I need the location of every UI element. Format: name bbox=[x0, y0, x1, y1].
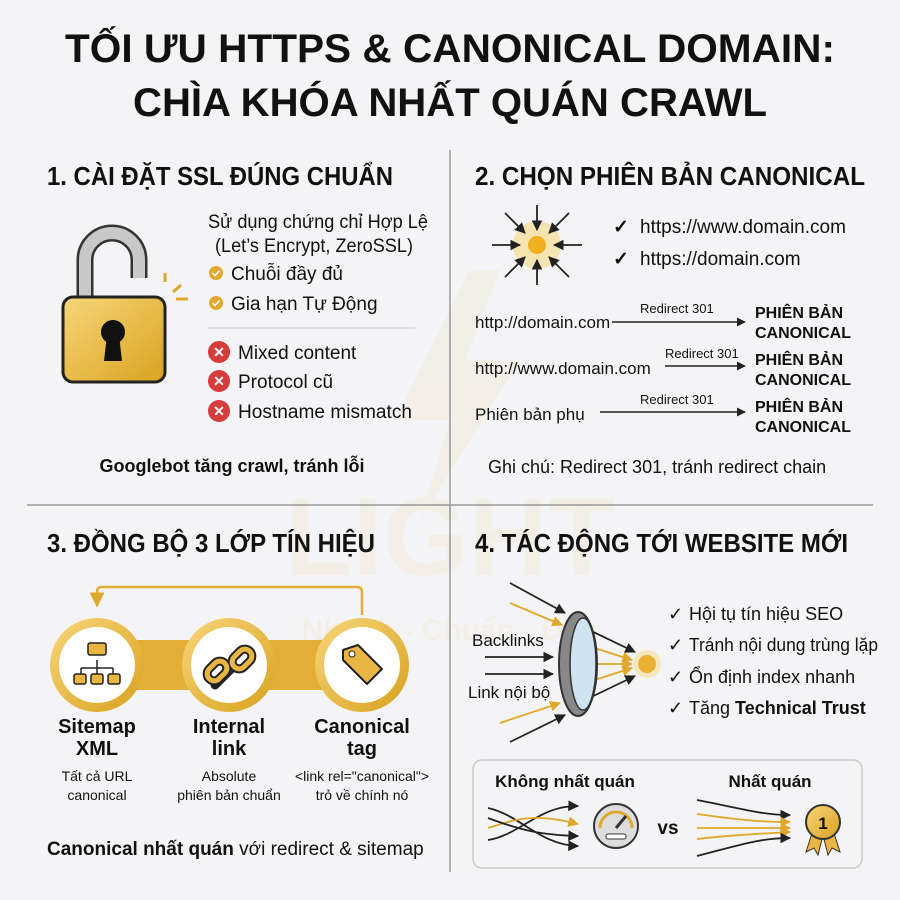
panel: impact bbox=[468, 528, 878, 868]
list: errors: Protocol cũ bbox=[238, 372, 333, 393]
list: chosen versions bbox=[613, 217, 846, 270]
redirect rows: PHIÊN BẢN bbox=[755, 350, 843, 369]
icon: link bbox=[204, 646, 255, 685]
icon: convergence burst bbox=[492, 205, 582, 285]
list: errors: ✕ bbox=[213, 344, 225, 360]
comparison box: vs bbox=[657, 818, 679, 839]
list: chosen versions: ✓ bbox=[613, 217, 629, 238]
labels: phiên bản chuẩn bbox=[177, 787, 281, 803]
labels: canonical bbox=[67, 787, 127, 803]
heading 2: 2. CHỌN PHIÊN BẢN CANONICAL bbox=[475, 161, 865, 191]
lens diagram: Backlinks bbox=[472, 631, 544, 650]
labels: <link rel="canonical"> bbox=[295, 768, 429, 784]
lens diagram: Link nội bộ bbox=[468, 683, 550, 702]
list: chosen versions: https://domain.com bbox=[640, 249, 801, 270]
list: chosen versions: https://www.domain.com bbox=[640, 217, 846, 238]
watermark: LIGHT bbox=[285, 476, 615, 599]
icon: gauge bbox=[594, 804, 638, 848]
list: chosen versions: ✓ bbox=[613, 249, 629, 270]
watermark bbox=[285, 270, 615, 647]
list: benefits: ✓ bbox=[668, 698, 683, 718]
note: Ghi chú: Redirect 301, tránh redirect chain bbox=[488, 457, 826, 477]
list: benefits: Tăng Technical Trust bbox=[689, 698, 866, 718]
list: errors bbox=[208, 341, 412, 423]
arrow: loop bbox=[97, 587, 362, 615]
title bbox=[65, 25, 835, 125]
labels: tag bbox=[347, 738, 377, 760]
labels: Absolute bbox=[202, 768, 256, 784]
heading 1: 1. CÀI ĐẶT SSL ĐÚNG CHUẨN bbox=[47, 161, 393, 191]
panel: canonical bbox=[475, 161, 865, 477]
labels: Tất cả URL bbox=[62, 768, 133, 784]
list: benefits: ✓ bbox=[668, 604, 683, 624]
labels bbox=[58, 716, 429, 803]
comparison box bbox=[473, 760, 862, 868]
lens diagram bbox=[468, 583, 661, 742]
list: benefits: Hội tụ tín hiệu SEO bbox=[689, 604, 843, 624]
redirect rows: CANONICAL bbox=[755, 372, 851, 389]
text: valid cert: Chuỗi đầy đủ bbox=[231, 263, 343, 285]
text: valid cert: Gia hạn Tự Động bbox=[231, 294, 378, 315]
watermark: Nhanh - Chuẩn - Đẹp bbox=[302, 614, 598, 647]
icon: medal bbox=[806, 805, 840, 855]
text: valid cert: Sử dụng chứng chỉ Hợp Lệ bbox=[208, 212, 428, 233]
panel: SSL bbox=[47, 161, 428, 476]
heading 4: 4. TÁC ĐỘNG TỚI WEBSITE MỚI bbox=[475, 528, 848, 558]
redirect rows: PHIÊN BẢN bbox=[755, 303, 843, 322]
panel: signals bbox=[47, 528, 429, 860]
comparison box: Nhất quán bbox=[728, 772, 812, 791]
list: benefits: Ổn định index nhanh bbox=[689, 666, 855, 687]
list: errors: ✕ bbox=[213, 403, 225, 419]
redirect rows: http://domain.com bbox=[475, 313, 610, 332]
redirect rows: Redirect 301 bbox=[665, 346, 739, 361]
icon: medal: 1 bbox=[818, 814, 828, 833]
redirect rows: PHIÊN BẢN bbox=[755, 397, 843, 416]
text: valid cert: (Let’s Encrypt, ZeroSSL) bbox=[215, 236, 413, 257]
labels: trỏ về chính nó bbox=[316, 787, 409, 803]
redirect rows: Phiên bản phụ bbox=[475, 405, 585, 424]
list: benefits: Tránh nội dung trùng lặp bbox=[689, 635, 878, 655]
title: TỐI ƯU HTTPS & CANONICAL DOMAIN: bbox=[65, 25, 835, 71]
chain of circles bbox=[50, 618, 409, 712]
list: benefits: ✓ bbox=[668, 667, 683, 687]
redirect rows: CANONICAL bbox=[755, 325, 851, 342]
list: errors: Mixed content bbox=[238, 343, 357, 364]
list: benefits bbox=[668, 604, 878, 718]
labels: Canonical bbox=[314, 716, 410, 738]
labels: Internal bbox=[193, 716, 265, 738]
redirect rows: CANONICAL bbox=[755, 419, 851, 436]
labels: XML bbox=[76, 738, 118, 760]
caption: Canonical nhất quán với redirect & sitemap bbox=[47, 839, 424, 860]
icon: padlock bbox=[63, 233, 188, 382]
icon: tag bbox=[343, 645, 382, 684]
icon: sitemap bbox=[74, 643, 120, 684]
heading 3: 3. ĐỒNG BỘ 3 LỚP TÍN HIỆU bbox=[47, 528, 375, 558]
text: valid cert bbox=[208, 212, 428, 315]
caption: Googlebot tăng crawl, tránh lỗi bbox=[99, 455, 365, 476]
comparison box: Không nhất quán bbox=[495, 772, 635, 791]
list: errors: Hostname mismatch bbox=[238, 402, 412, 423]
redirect rows bbox=[475, 301, 851, 436]
labels: link bbox=[212, 738, 247, 760]
title: CHÌA KHÓA NHẤT QUÁN CRAWL bbox=[133, 79, 767, 125]
list: benefits: ✓ bbox=[668, 635, 683, 655]
labels: Sitemap bbox=[58, 716, 136, 738]
redirect rows: http://www.domain.com bbox=[475, 359, 651, 378]
redirect rows: Redirect 301 bbox=[640, 392, 714, 407]
redirect rows: Redirect 301 bbox=[640, 301, 714, 316]
list: errors: ✕ bbox=[213, 373, 225, 389]
